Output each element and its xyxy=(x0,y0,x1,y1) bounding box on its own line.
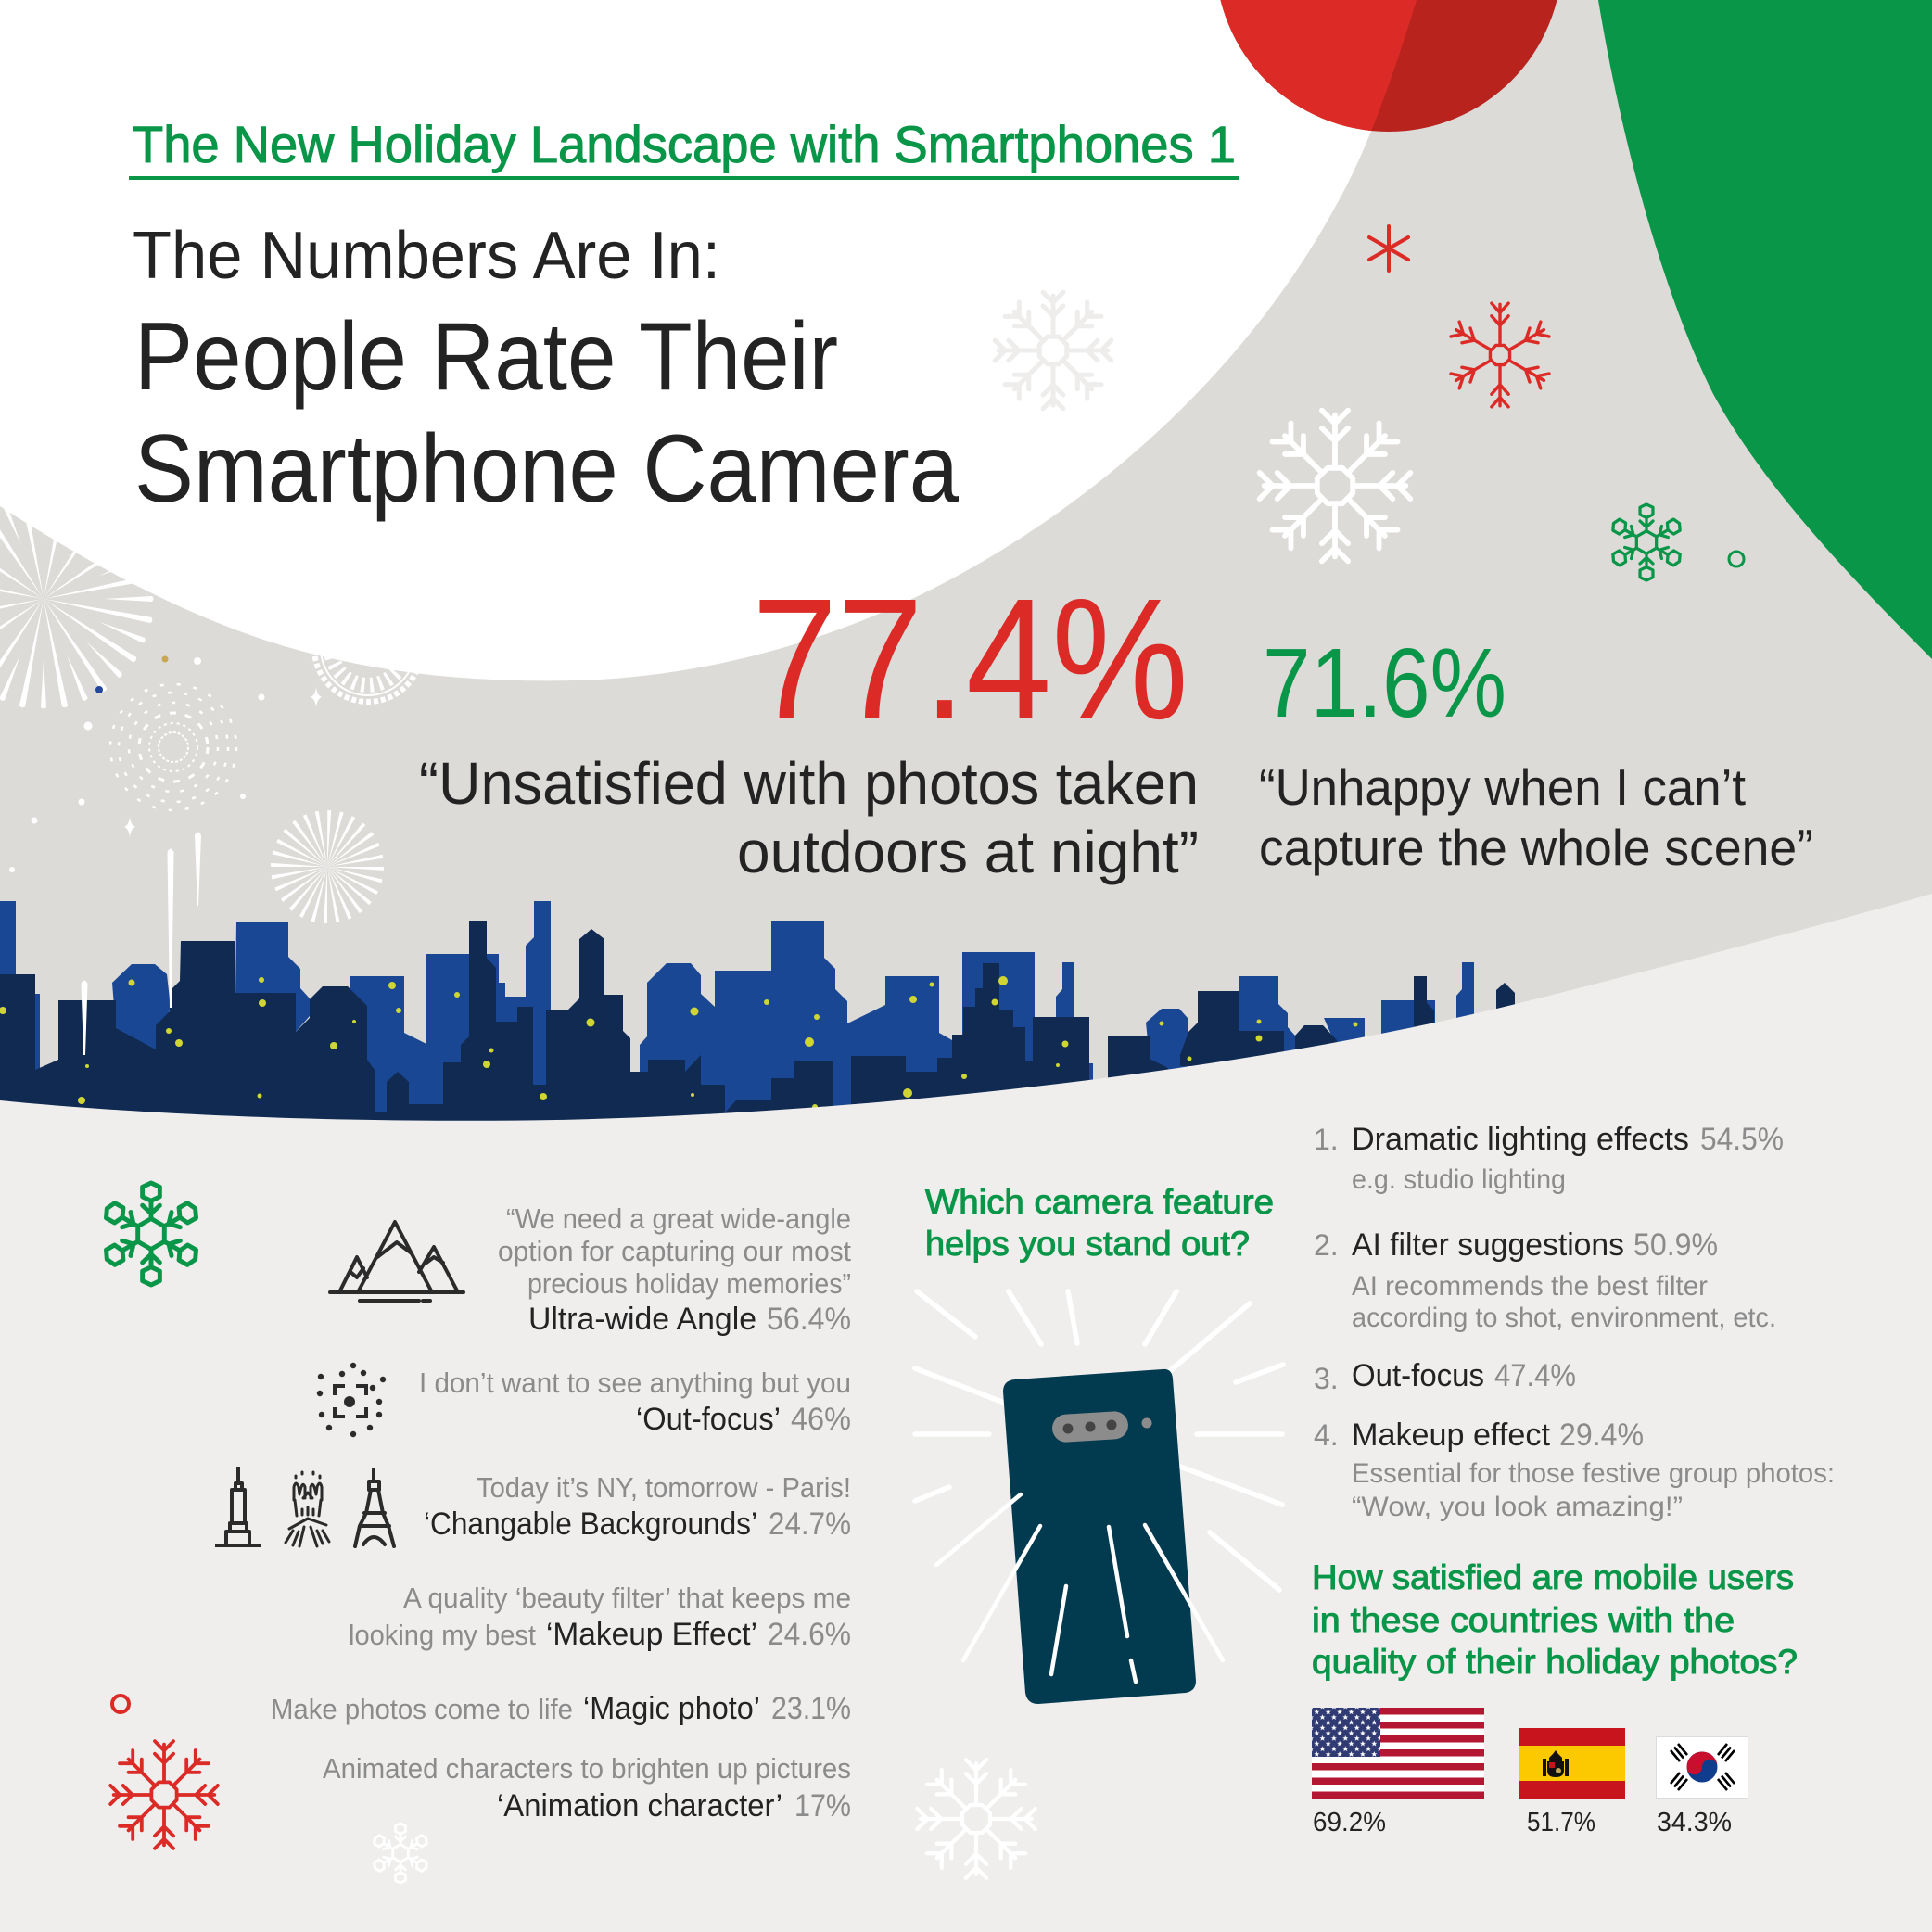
ranked feature list: 2. xyxy=(1314,1228,1339,1262)
main heading: Smartphone Camera xyxy=(134,415,959,523)
ranked feature list: Essential for those festive group photos: xyxy=(1352,1458,1835,1489)
flag: USA xyxy=(1312,1708,1484,1799)
sky dots and sparkles xyxy=(9,656,322,872)
fireworks xyxy=(0,489,422,896)
phone body xyxy=(1003,1369,1196,1704)
ranked feature list: Out-focus xyxy=(1352,1358,1484,1393)
icon: landmarks xyxy=(215,1467,394,1546)
camera feature question: Which camera feature xyxy=(925,1183,1274,1221)
icon: mountains xyxy=(330,1222,464,1301)
red ornament circle xyxy=(1215,0,1562,132)
magic photo text: ‘Magic photo’ xyxy=(583,1691,760,1726)
satisfaction question xyxy=(1312,1558,1798,1681)
stat: 77.4% xyxy=(419,564,1199,885)
satisfaction question: quality of their holiday photos? xyxy=(1312,1643,1798,1681)
animation character text: 17% xyxy=(794,1788,851,1824)
ranked feature list: AI filter suggestions xyxy=(1352,1227,1624,1263)
makeup effect text: A quality ‘beauty filter’ that keeps me xyxy=(403,1582,851,1614)
makeup effect text: ‘Makeup Effect’ xyxy=(546,1617,757,1652)
main heading xyxy=(133,219,959,523)
magic photo text: 23.1% xyxy=(771,1691,851,1726)
flag: South Korea xyxy=(1656,1737,1748,1799)
makeup effect text xyxy=(349,1582,851,1652)
changable backgrounds text: 24.7% xyxy=(769,1506,851,1542)
stat: 77.4%: “Unsatisfied with photos taken xyxy=(419,750,1199,817)
ranked feature list: 29.4% xyxy=(1559,1417,1644,1453)
ranked feature list xyxy=(1314,1122,1835,1522)
ranked feature list: 50.9% xyxy=(1633,1227,1718,1263)
camera module xyxy=(1051,1411,1151,1443)
out-focus text xyxy=(419,1366,851,1437)
ultra-wide text: “We need a great wide-angle xyxy=(506,1202,851,1235)
main heading: People Rate Their xyxy=(134,303,838,411)
satisfaction question: in these countries with the xyxy=(1312,1601,1735,1639)
satisfaction question: How satisfied are mobile users xyxy=(1312,1558,1794,1596)
white arc panel xyxy=(0,0,1417,680)
phone with light rays xyxy=(915,1291,1283,1704)
series title: The New Holiday Landscape with Smartphones 1 xyxy=(133,115,1236,173)
out-focus text: I don’t want to see anything but you xyxy=(419,1366,851,1399)
ranked feature list: “Wow, you look amazing!” xyxy=(1352,1492,1683,1522)
ultra-wide text xyxy=(498,1202,851,1337)
animation character text: ‘Animation character’ xyxy=(497,1788,782,1824)
changable backgrounds text: ‘Changable Backgrounds’ xyxy=(424,1506,757,1542)
snowflakes upper xyxy=(995,226,1744,580)
ultra-wide text: precious holiday memories” xyxy=(527,1267,851,1300)
camera feature question: helps you stand out? xyxy=(925,1225,1250,1263)
out-focus text: 46% xyxy=(791,1402,851,1437)
flag percentages: 51.7% xyxy=(1527,1808,1595,1837)
makeup effect text: looking my best xyxy=(349,1619,536,1651)
green corner shape xyxy=(1598,0,1932,659)
city skyline xyxy=(0,833,1515,1126)
lower panel background xyxy=(0,894,1932,1932)
stat: 71.6%: “Unhappy when I can’t xyxy=(1259,758,1746,816)
animation character text xyxy=(323,1752,851,1824)
ultra-wide text: Ultra-wide Angle xyxy=(528,1302,756,1337)
magic photo text: Make photos come to life xyxy=(271,1693,573,1725)
stat: 77.4%: outdoors at night” xyxy=(737,819,1199,885)
flag percentages: 69.2% xyxy=(1313,1808,1386,1837)
ranked feature list: AI recommends the best filter xyxy=(1352,1271,1708,1302)
ranked feature list: 47.4% xyxy=(1494,1358,1576,1393)
makeup effect text: 24.6% xyxy=(768,1617,851,1652)
flag: Spain xyxy=(1519,1728,1625,1799)
ultra-wide text: option for capturing our most xyxy=(498,1235,851,1267)
ranked feature list: 1. xyxy=(1314,1123,1339,1156)
ultra-wide text: 56.4% xyxy=(767,1302,851,1337)
stat: 77.4%: 77.4% xyxy=(752,564,1188,756)
stat: 71.6%: 71.6% xyxy=(1263,629,1506,738)
stat: 71.6%: capture the whole scene” xyxy=(1259,819,1813,876)
ranked feature list: 4. xyxy=(1314,1418,1339,1452)
ranked feature list: 54.5% xyxy=(1700,1122,1784,1157)
ranked feature list: 3. xyxy=(1314,1362,1339,1395)
changable backgrounds text xyxy=(424,1471,851,1542)
flag percentages: 34.3% xyxy=(1657,1808,1732,1837)
camera feature question xyxy=(925,1183,1274,1263)
out-focus text: ‘Out-focus’ xyxy=(636,1402,781,1437)
main heading: The Numbers Are In: xyxy=(133,219,720,293)
ranked feature list: Dramatic lighting effects xyxy=(1352,1122,1689,1157)
ranked feature list: Makeup effect xyxy=(1352,1417,1551,1453)
ranked feature list: e.g. studio lighting xyxy=(1352,1164,1566,1195)
flag percentages xyxy=(1313,1808,1732,1837)
stat: 71.6% xyxy=(1259,629,1813,876)
changable backgrounds text: Today it’s NY, tomorrow - Paris! xyxy=(477,1471,851,1504)
ranked feature list: according to shot, environment, etc. xyxy=(1352,1303,1776,1333)
magic photo text xyxy=(271,1691,851,1726)
snowflakes lower xyxy=(103,1183,1036,1883)
icon: focus xyxy=(317,1363,386,1437)
animation character text: Animated characters to brighten up pictures xyxy=(323,1752,851,1785)
